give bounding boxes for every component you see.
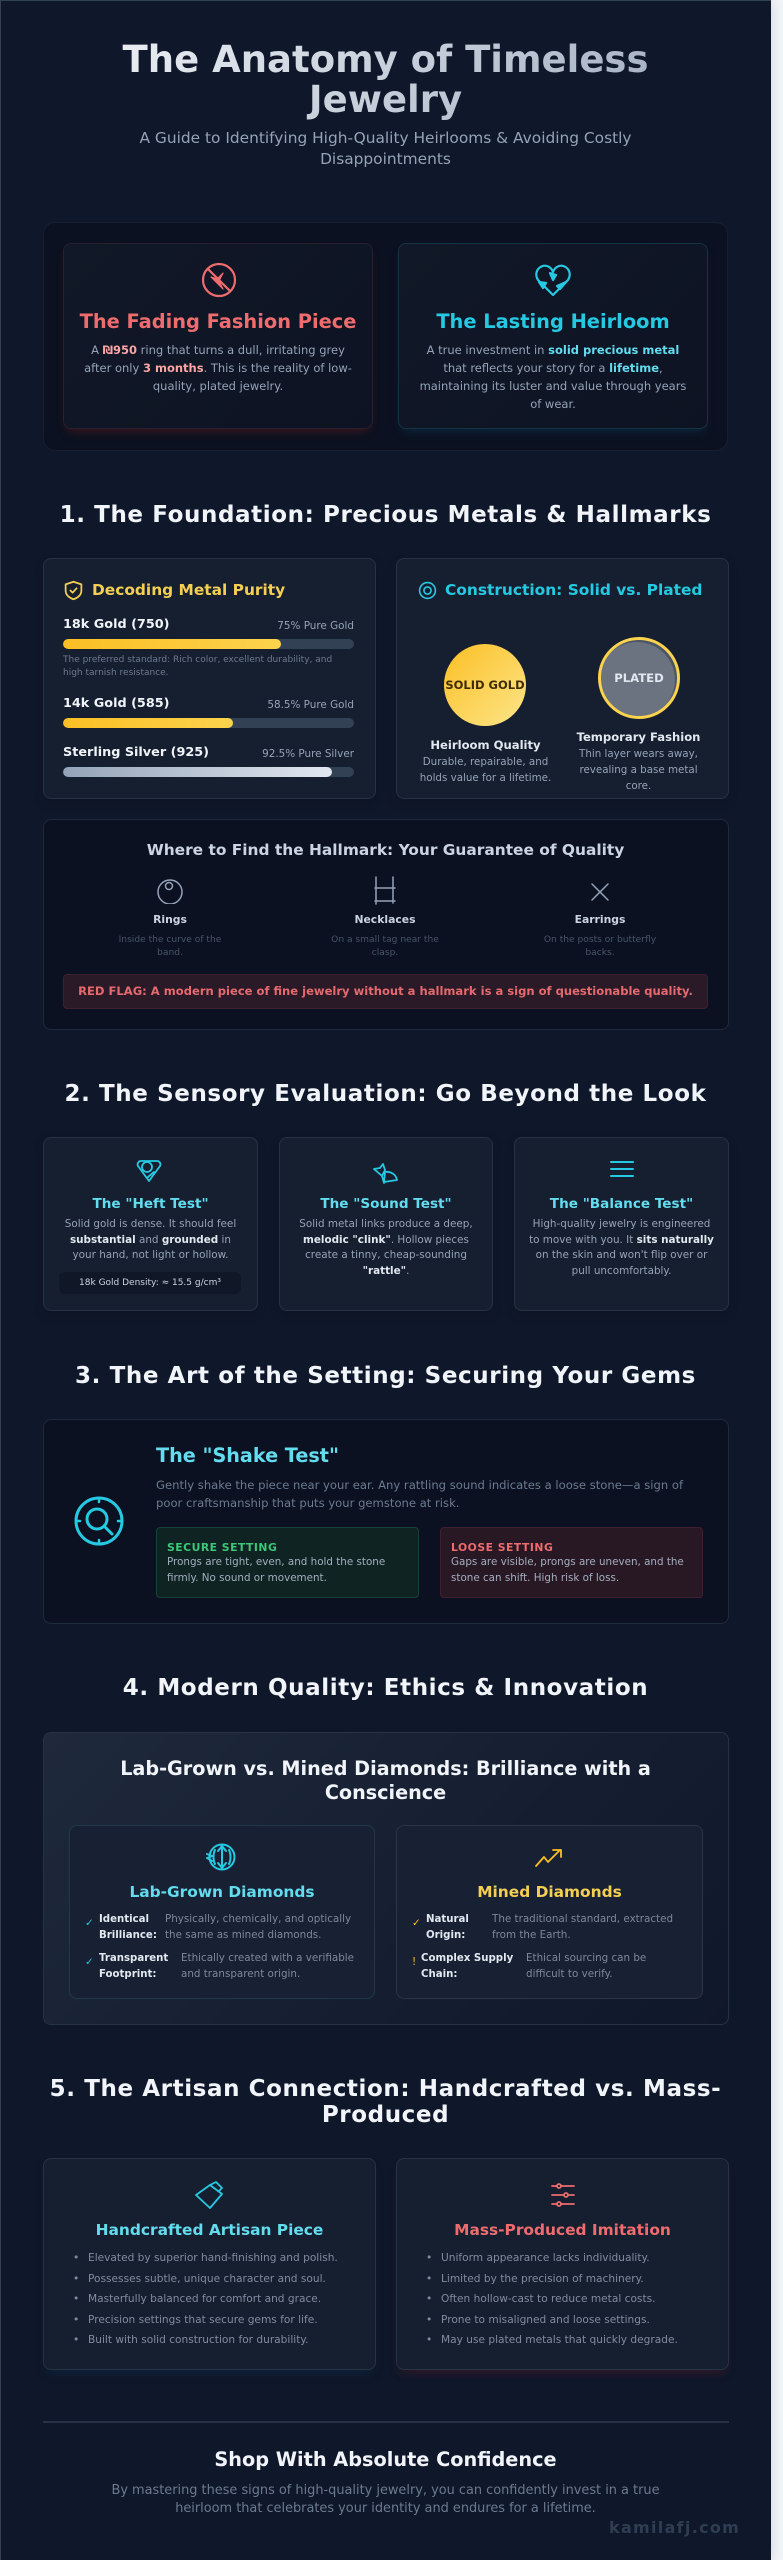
diagram: plated coin: PLATED — [614, 671, 664, 685]
text: necklaces: clasp. — [372, 948, 398, 958]
text: heirloom quality: Durable, repairable, and — [423, 756, 548, 768]
icon: mined trend — [535, 1849, 562, 1867]
heading: sound test: The "Sound Test" — [320, 1196, 452, 1212]
panel: balance test — [514, 1137, 729, 1311]
bar: 18k gold — [63, 639, 354, 649]
text: Prone to misaligned and loose settings. — [441, 2314, 650, 2326]
text: balance test: High-quality jewelry is engineered — [533, 1218, 710, 1230]
icon: eye target — [418, 582, 436, 600]
section heading 2: 2. The Sensory Evaluation: Go Beyond the Look — [64, 1081, 707, 1107]
list: lab-grown: and transparent origin. — [181, 1968, 300, 1980]
icon: necklace — [374, 876, 396, 905]
list: mined: Natural — [426, 1914, 469, 1925]
heading: mined: Mined Diamonds — [477, 1883, 622, 1901]
watermark: kamilafj.com — [609, 2518, 740, 2537]
heading: lasting heirloom: The Lasting Heirloom — [436, 310, 670, 333]
list: lab-grown: Ethically created with a verifiable — [181, 1952, 354, 1964]
text: balance test: pull uncomfortably. — [572, 1264, 671, 1276]
card: lab-grown — [69, 1825, 375, 1999]
text: fading fashion piece: A ₪950 ring that turns a dull, irritating grey — [91, 343, 345, 357]
text: rings: Inside the curve of the — [119, 935, 221, 945]
text: lasting heirloom: of wear. — [530, 397, 576, 411]
row: sterling silver: Sterling Silver (925) — [63, 745, 209, 760]
panel: hero comparison — [43, 222, 728, 451]
section heading 5: 5. The Artisan Connection: Handcrafted vs. Mass- — [50, 2076, 721, 2102]
icon: balance lines — [610, 1161, 634, 1177]
list: mass produced — [426, 2252, 678, 2346]
text: Elevated by superior hand-finishing and polish. — [88, 2252, 338, 2264]
title: The Anatomy of Timeless — [123, 38, 648, 81]
list: lab-grown: Physically, chemically, and optically — [165, 1913, 351, 1925]
icon: no fast fashion — [202, 262, 236, 298]
text: Possesses subtle, unique character and soul. — [88, 2272, 326, 2284]
section heading 5 — [50, 2076, 721, 2128]
heading: construction: Construction: Solid vs. Plated — [445, 581, 702, 599]
text: shake test: poor craftsmanship that puts your gemstone at risk. — [156, 1496, 459, 1510]
text: earrings: backs. — [585, 948, 615, 958]
note: 18k gold — [63, 655, 332, 678]
heading: shake test: The "Shake Test" — [156, 1444, 339, 1467]
heading: lab vs mined: Conscience — [325, 1781, 446, 1804]
text: fading fashion piece — [84, 343, 352, 393]
heading: lab vs mined: Lab-Grown vs. Mined Diamonds: Brilliance with a — [120, 1757, 651, 1780]
icon: heart with arrows — [535, 264, 571, 296]
list: lab-grown: Identical — [99, 1914, 149, 1925]
list: lab-grown: Transparent — [99, 1953, 168, 1964]
text: fading fashion piece: after only 3 months. This is the reality of low- — [84, 361, 352, 375]
subtitle: Disappointments — [320, 150, 451, 168]
list: lab-grown: ✓ — [85, 1956, 94, 1968]
heading: hallmark: Where to Find the Hallmark: Your Guarantee of Quality — [147, 841, 624, 859]
text: heirloom quality: Heirloom Quality — [430, 738, 541, 752]
text: Masterfully balanced for comfort and grace. — [88, 2293, 321, 2305]
heading: fading fashion piece: The Fading Fashion Piece — [80, 310, 356, 333]
list: mined — [412, 1913, 673, 1980]
box: loose setting: Gaps are visible, prongs are uneven, and the — [451, 1556, 684, 1568]
panel: heft test — [43, 1137, 258, 1311]
text: Uniform appearance lacks individuality. — [441, 2252, 650, 2264]
list: lab-grown: the same as mined diamonds. — [165, 1928, 321, 1940]
text: heft test — [65, 1218, 236, 1261]
box: secure setting: firmly. No sound or movement. — [167, 1572, 327, 1584]
list: mined: Ethical sourcing can be — [526, 1952, 646, 1964]
item: identical brilliance — [85, 1913, 351, 1940]
text: rings: Rings — [153, 913, 187, 926]
icon: shield check — [64, 580, 82, 600]
text: • — [73, 2334, 79, 2346]
heading: mass produced: Mass-Produced Imitation — [454, 2221, 671, 2239]
panel: decoding metal purity — [43, 558, 376, 799]
list: lab-grown — [85, 1913, 354, 1980]
panel: mass produced — [396, 2158, 729, 2370]
icon: sound — [373, 1163, 398, 1184]
list: handcrafted — [73, 2252, 338, 2346]
list: mined: ! — [412, 1956, 416, 1968]
list: mined: Complex Supply — [421, 1953, 513, 1964]
text: temporary fashion: core. — [626, 780, 651, 792]
section heading 5: Produced — [322, 2102, 449, 2128]
text: temporary fashion — [576, 730, 700, 792]
text: heft test: your hand, not light or hollow. — [73, 1249, 228, 1261]
title: Jewelry — [309, 78, 462, 121]
card: fading fashion piece — [63, 243, 373, 429]
panel: shake test — [43, 1419, 729, 1624]
note: 18k gold: high tarnish resistance. — [63, 668, 169, 678]
panel: lab vs mined — [43, 1732, 729, 2025]
diagram: solid gold coin: SOLID GOLD — [445, 678, 525, 692]
list: mined: ✓ — [412, 1917, 421, 1929]
heading: handcrafted: Handcrafted Artisan Piece — [96, 2221, 323, 2239]
text: sound test: "rattle". — [363, 1264, 409, 1276]
text: • — [426, 2334, 432, 2346]
text: • — [426, 2272, 432, 2284]
text: lasting heirloom: that reflects your story for a lifetime, — [443, 361, 663, 375]
text: lasting heirloom: A true investment in solid precious metal — [427, 343, 679, 357]
text: • — [73, 2293, 79, 2305]
icon: sliders — [551, 2183, 575, 2207]
text: earrings: On the posts or butterfly — [544, 935, 656, 945]
text: fading fashion piece: quality, plated jewelry. — [153, 379, 283, 393]
panel: construction — [396, 558, 729, 799]
text: sound test — [299, 1218, 473, 1276]
icon: heft — [136, 1160, 162, 1182]
text: Built with solid construction for durability. — [88, 2334, 309, 2346]
text: temporary fashion: Temporary Fashion — [577, 730, 700, 744]
title — [0, 40, 771, 120]
text: sound test: melodic "clink". Hollow pieces — [303, 1234, 469, 1246]
list: mined: The traditional standard, extracted — [492, 1913, 673, 1925]
text: • — [426, 2314, 432, 2326]
panel: hallmark — [43, 819, 729, 1030]
bar: 14k gold — [63, 718, 354, 728]
panel: sound test — [279, 1137, 493, 1311]
text: • — [426, 2252, 432, 2264]
card: mined — [396, 1825, 703, 1999]
text: • — [73, 2252, 79, 2264]
text: sound test: Solid metal links produce a deep, — [299, 1218, 473, 1230]
text: earrings — [544, 913, 656, 958]
closing text — [111, 2483, 660, 2516]
row: 14k gold: 14k Gold (585) — [63, 696, 169, 711]
text: lasting heirloom — [420, 343, 686, 411]
list: lab-grown: Footprint: — [99, 1968, 156, 1980]
text: temporary fashion: Thin layer wears away, — [579, 748, 698, 760]
icon: gem tag — [195, 2181, 223, 2209]
text: May use plated metals that quickly degrade. — [441, 2334, 678, 2346]
text: balance test: on the skin and won't flip over or — [536, 1249, 707, 1261]
subtitle — [139, 129, 632, 168]
subtitle: A Guide to Identifying High-Quality Heirlooms & Avoiding Costly — [139, 129, 632, 147]
section heading 3: 3. The Art of the Setting: Securing Your Gems — [75, 1363, 696, 1389]
section heading 4: 4. Modern Quality: Ethics & Innovation — [123, 1675, 648, 1701]
callout: red flag: RED FLAG: A modern piece of fine jewelry without a hallmark is a sign of questionable quality. — [78, 984, 693, 998]
text: • — [426, 2293, 432, 2305]
text: rings — [119, 913, 221, 958]
list: mined: Origin: — [426, 1930, 465, 1940]
callout: red flag — [63, 974, 708, 1009]
diagram: plated coin — [598, 637, 680, 719]
icon: ring — [157, 879, 183, 904]
icon: earrings — [591, 883, 609, 901]
box: secure setting — [156, 1527, 419, 1598]
heading: decoding metal purity: Decoding Metal Purity — [92, 581, 285, 599]
text: heft test: substantial and grounded in — [70, 1234, 231, 1246]
box: loose setting — [440, 1527, 703, 1598]
list: mined: difficult to verify. — [526, 1968, 613, 1980]
heading: lab-grown: Lab-Grown Diamonds — [129, 1883, 315, 1901]
bar: sterling silver — [63, 767, 354, 777]
text: Often hollow-cast to reduce metal costs. — [441, 2293, 656, 2305]
text: heft test: Solid gold is dense. It should feel — [65, 1218, 236, 1230]
text: earrings: Earrings — [575, 913, 625, 926]
text: 92.5% Pure Silver — [262, 748, 354, 760]
list: lab-grown: Brilliance: — [99, 1930, 157, 1940]
card: lasting heirloom — [398, 243, 708, 429]
icon: magnifier dial — [74, 1496, 124, 1546]
text: necklaces: On a small tag near the — [331, 935, 439, 945]
box: secure setting: Prongs are tight, even, and hold the stone — [167, 1556, 385, 1568]
text: balance test: to move with you. It sits naturally — [529, 1234, 714, 1246]
text: rings: band. — [157, 948, 183, 958]
text: shake test: Gently shake the piece near your ear. Any rattling sound indicates a loose stone—a sign of — [156, 1478, 683, 1492]
closing text: By mastering these signs of high-quality jewelry, you can confidently invest in a true — [111, 2483, 660, 2498]
list: mined: Chain: — [421, 1968, 457, 1980]
text: Precision settings that secure gems for life. — [88, 2314, 318, 2326]
heading: heft test: The "Heft Test" — [92, 1196, 209, 1212]
text: shake test — [156, 1478, 684, 1510]
text: Limited by the precision of machinery. — [441, 2272, 644, 2284]
item: natural origin — [412, 1913, 673, 1940]
panel: handcrafted — [43, 2158, 376, 2370]
item: transparent footprint — [85, 1952, 354, 1980]
box: loose setting: LOOSE SETTING — [451, 1541, 553, 1554]
text: • — [73, 2314, 79, 2326]
text: heirloom quality: holds value for a lifetime. — [420, 772, 551, 784]
list: mined: from the Earth. — [492, 1928, 571, 1940]
stat pill: density — [59, 1272, 241, 1294]
closing heading: Shop With Absolute Confidence — [214, 2448, 557, 2471]
text: heirloom quality — [420, 738, 551, 784]
list: lab-grown: ✓ — [85, 1917, 94, 1929]
note: 18k gold: The preferred standard: Rich color, excellent durability, and — [63, 655, 332, 665]
divider — [43, 2421, 729, 2423]
text: necklaces: Necklaces — [354, 913, 416, 926]
icon: lab-grown globe — [206, 1844, 236, 1870]
closing text: heirloom that celebrates your identity and endures for a lifetime. — [175, 2501, 596, 2516]
heading: lab vs mined — [120, 1757, 651, 1804]
heading: balance test: The "Balance Test" — [550, 1196, 693, 1212]
box: secure setting: SECURE SETTING — [167, 1541, 277, 1554]
text: lasting heirloom: maintaining its luster and value through years — [420, 379, 686, 393]
text: • — [73, 2272, 79, 2284]
diagram: solid gold coin — [444, 644, 526, 726]
section heading 1: 1. The Foundation: Precious Metals & Hallmarks — [60, 502, 711, 528]
text: necklaces — [331, 913, 439, 958]
box: loose setting: stone can shift. High risk of loss. — [451, 1572, 619, 1584]
text: balance test — [529, 1218, 714, 1276]
text: temporary fashion: revealing a base metal — [579, 764, 698, 776]
stat pill: density: 18k Gold Density: ≈ 15.5 g/cm³ — [79, 1278, 221, 1288]
text: 75% Pure Gold — [277, 620, 354, 632]
item: complex supply chain — [412, 1952, 646, 1980]
text: sound test: create a tinny, cheap-sounding — [305, 1249, 467, 1261]
text: 58.5% Pure Gold — [267, 699, 354, 711]
row: 18k gold: 18k Gold (750) — [63, 617, 169, 632]
